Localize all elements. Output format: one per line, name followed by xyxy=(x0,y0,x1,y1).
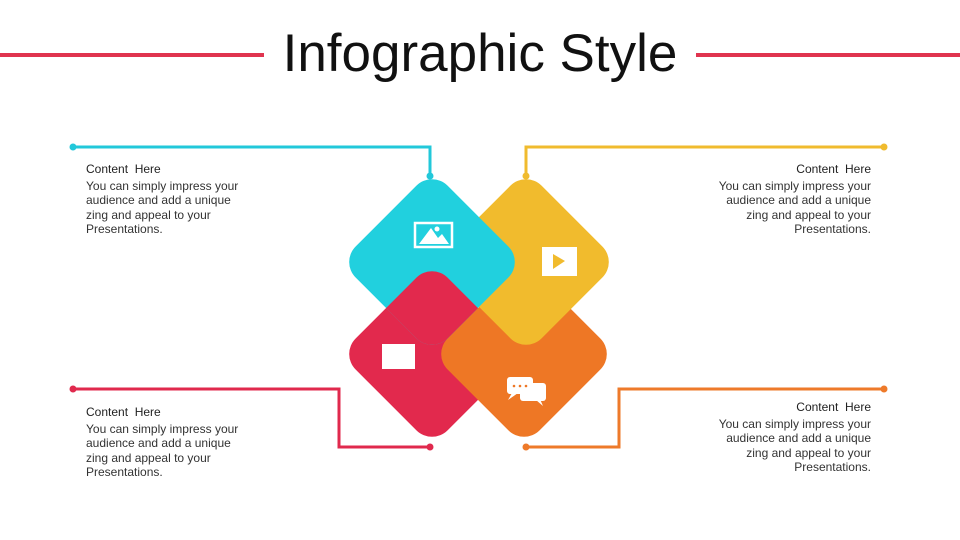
connector: cyan xyxy=(70,144,434,180)
connector: yellow xyxy=(522,144,888,180)
title: Infographic Style xyxy=(283,24,677,83)
diamond: yellow xyxy=(434,170,618,354)
icon: image xyxy=(415,223,452,247)
text: top right: You can simply impress your audience and add a unique zing and appeal to your Presentations. xyxy=(719,179,871,236)
connector: red xyxy=(70,386,434,450)
diamond: orange xyxy=(432,262,616,446)
diamond: red xyxy=(340,262,524,446)
text: top right: Content Here xyxy=(796,162,871,176)
text: bottom right: Content Here xyxy=(796,400,871,414)
text: bottom left: Content Here xyxy=(86,405,161,419)
icon: video xyxy=(542,247,577,276)
diamond: cyan xyxy=(340,170,524,354)
icon: chat xyxy=(507,377,546,406)
text: bottom right: You can simply impress your audience and add a unique zing and appeal to your Presentations. xyxy=(719,417,871,474)
text: top left: Content Here xyxy=(86,162,161,176)
connector: orange xyxy=(522,386,888,450)
diamond: red overlay xyxy=(386,271,478,345)
icon: card xyxy=(382,344,415,369)
text: bottom left: You can simply impress your audience and add a unique zing and appeal to your Presentations. xyxy=(86,422,238,479)
text: top left: You can simply impress your audience and add a unique zing and appeal to your Presentations. xyxy=(86,179,238,236)
